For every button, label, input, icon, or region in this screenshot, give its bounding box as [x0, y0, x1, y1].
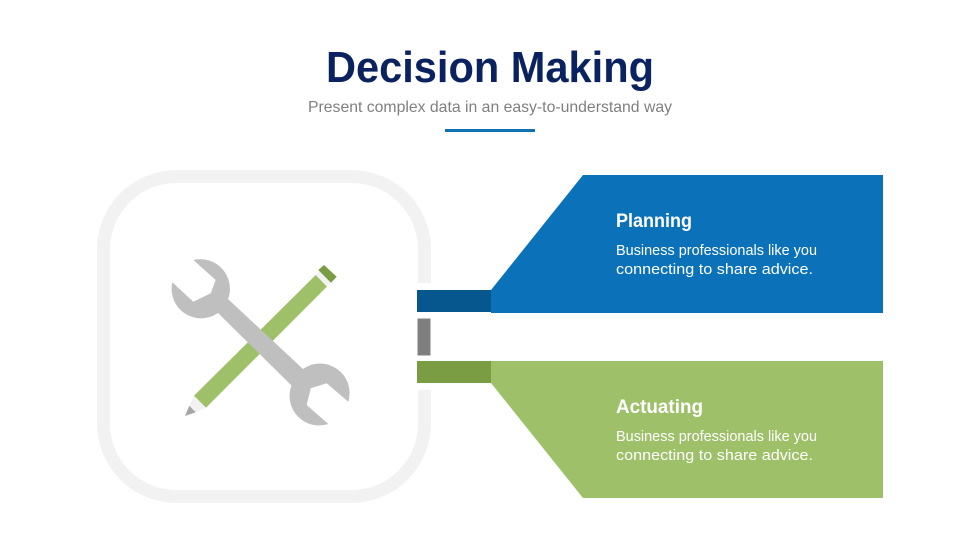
connector: dark green bar: [417, 361, 491, 383]
panel: actuating: [491, 361, 883, 498]
title underline: [445, 129, 535, 132]
text block: planning description: connecting to share advice.: [616, 261, 813, 278]
connector: dark blue bar: [417, 290, 491, 312]
text block: actuating description: connecting to share advice.: [616, 447, 813, 464]
subtitle: Present complex data in an easy-to-understand way: [308, 99, 672, 116]
icon: pencil: [185, 265, 337, 416]
heading: planning: Planning: [616, 211, 692, 232]
panel: planning: [491, 175, 883, 313]
heading: actuating: Actuating: [616, 397, 703, 418]
icon: wrench: [172, 259, 350, 425]
connector: grey bar: [418, 318, 430, 356]
text block: planning description: Business professionals like you: [616, 242, 817, 259]
text block: actuating description: Business professionals like you: [616, 428, 817, 445]
panel: rounded icon frame: [104, 176, 433, 496]
icon: crossed pencil and wrench: [172, 259, 350, 425]
title: Decision Making: [326, 43, 654, 92]
